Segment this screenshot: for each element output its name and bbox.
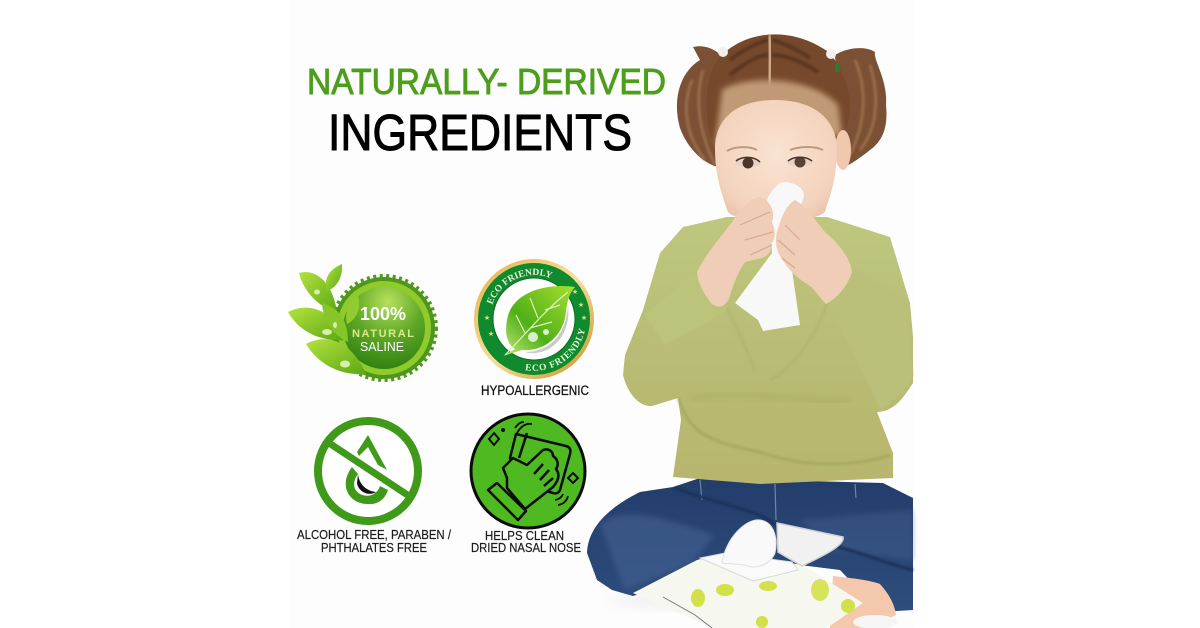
open lid	[777, 523, 843, 566]
label: hypoallergenic: HYPOALLERGENIC	[481, 383, 589, 398]
hair and pigtails	[677, 34, 886, 168]
cloth	[510, 433, 570, 493]
seal centre	[343, 287, 425, 369]
label: alcohol free: PHTHALATES FREE	[321, 541, 427, 555]
shadow on floor	[610, 592, 790, 608]
title line: naturally-derived: NATURALLY- DERIVED	[307, 61, 666, 102]
seal text: 100%	[360, 304, 406, 324]
drop highlight	[357, 474, 376, 494]
leaf shadow	[525, 305, 568, 353]
title line: ingredients: INGREDIENTS	[328, 104, 632, 161]
badge: eco friendly	[474, 259, 594, 379]
title	[307, 61, 666, 161]
badge stars: ★	[572, 288, 578, 296]
badge stars	[484, 288, 587, 338]
lid frame	[700, 553, 798, 581]
background panel	[290, 0, 914, 628]
badge stars: ★	[581, 314, 587, 322]
label: helps clean: HELPS CLEAN	[485, 529, 564, 543]
leaf	[503, 286, 575, 356]
jeans	[587, 478, 913, 612]
cream at bottom	[853, 615, 897, 628]
leaf veins	[505, 292, 568, 355]
badge stars: ★	[488, 330, 494, 338]
foot	[830, 576, 896, 628]
tissue	[735, 182, 804, 331]
seal text: SALINE	[360, 339, 404, 354]
finger lines	[740, 212, 800, 268]
badge stars: ★	[484, 314, 490, 322]
icon: hand wiping	[471, 414, 585, 528]
hair ties	[718, 47, 840, 72]
slash	[329, 443, 409, 496]
badge lettering: ECO FRIENDLY	[525, 328, 585, 371]
popped wipe	[722, 520, 776, 567]
seal text: NATURAL	[352, 328, 414, 340]
green shirt	[623, 217, 913, 484]
dew drops	[528, 332, 538, 342]
sparkles and motion marks	[489, 433, 578, 483]
badge lettering: ECO FRIENDLY	[486, 268, 553, 305]
cuff	[488, 483, 526, 520]
label: alcohol free	[297, 528, 451, 555]
child photo illustration	[587, 34, 913, 628]
hand	[503, 449, 558, 509]
badge lettering	[486, 268, 585, 371]
badge: 100% natural saline	[288, 264, 436, 380]
wipes package	[633, 520, 863, 628]
label: helps clean	[471, 529, 581, 555]
left hand	[697, 197, 775, 307]
eyes and brows	[727, 147, 823, 168]
badge stars: ★	[578, 301, 584, 309]
seal text	[352, 304, 414, 354]
label: alcohol free: ALCOHOL FREE, PARABEN /	[297, 528, 451, 542]
label: helps clean: DRIED NASAL NOSE	[471, 541, 581, 555]
leaves	[288, 264, 366, 374]
ear	[835, 130, 851, 170]
drop bottom	[346, 467, 388, 504]
face	[715, 100, 837, 222]
drop top	[357, 435, 387, 470]
right hand	[776, 200, 852, 304]
serrated ring	[332, 276, 436, 380]
icon: alcohol free drop	[318, 421, 418, 521]
